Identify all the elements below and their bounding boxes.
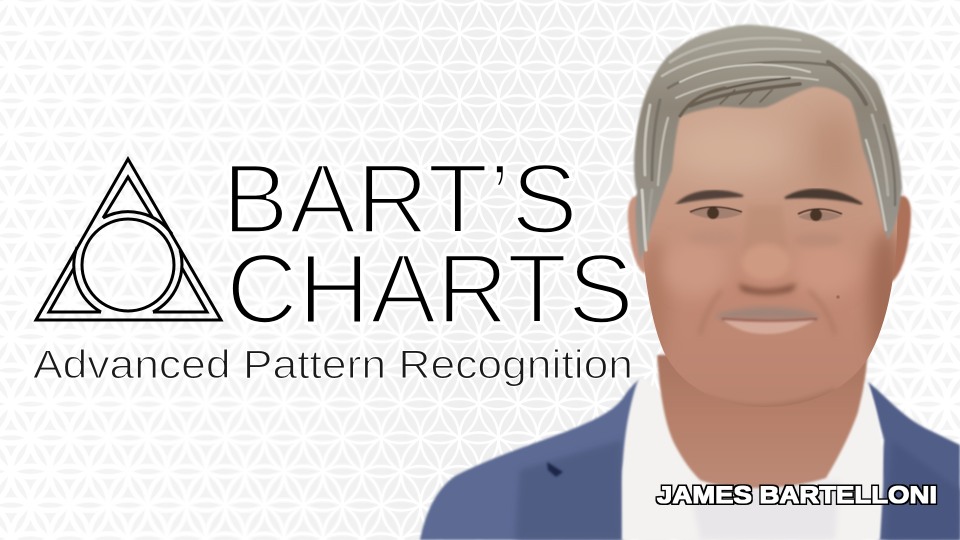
hair xyxy=(634,25,902,262)
mustache shadow xyxy=(714,307,820,320)
face xyxy=(640,60,897,407)
hair strands xyxy=(642,38,895,250)
left ear xyxy=(628,196,655,274)
left eye xyxy=(690,207,742,219)
mouth xyxy=(722,319,817,334)
face shading xyxy=(641,108,901,420)
jacket shading and plaid xyxy=(515,440,960,540)
right eyebrow xyxy=(785,190,862,204)
portrait: James Bartelloni xyxy=(420,25,960,540)
title: BART'S CHARTS: BART’S xyxy=(222,143,578,254)
nose xyxy=(738,205,797,294)
logo: triangle and circle emblem xyxy=(36,159,221,320)
right eye xyxy=(798,209,842,221)
right ear xyxy=(880,196,911,282)
jacket left xyxy=(420,378,642,540)
subtitle: Advanced Pattern Recognition: Advanced Pattern Recognition xyxy=(33,343,633,387)
jacket right xyxy=(868,382,960,540)
title: BART'S CHARTS: CHARTS xyxy=(226,233,634,344)
neck xyxy=(657,350,868,488)
title: BART'S CHARTS xyxy=(222,143,634,344)
shirt shading xyxy=(690,480,840,540)
jacket lapel notch xyxy=(547,462,563,477)
name label: JAMES BARTELLONI: JAMES BARTELLONI xyxy=(657,482,937,509)
shirt xyxy=(622,375,883,540)
left eyebrow xyxy=(678,191,743,203)
